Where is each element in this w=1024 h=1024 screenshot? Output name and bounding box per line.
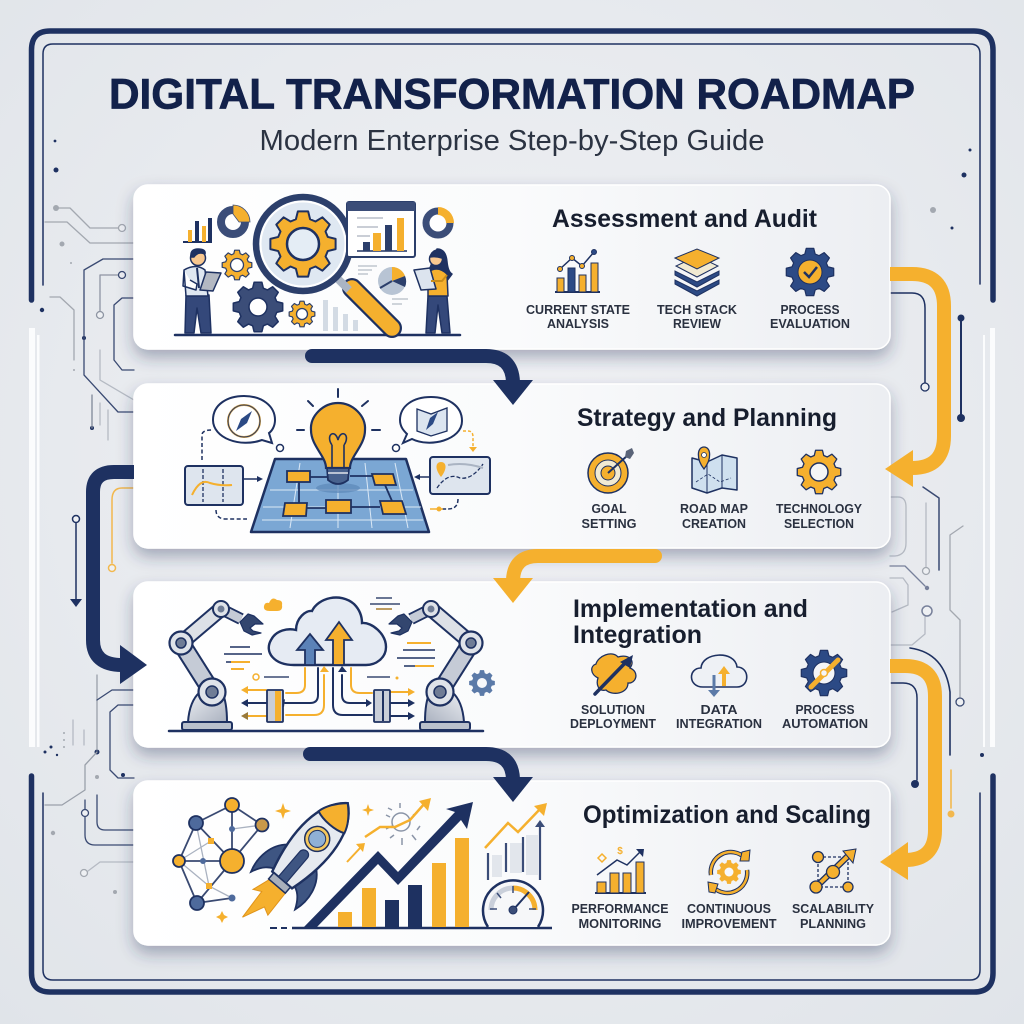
heading: Implementation and (573, 595, 808, 623)
panel 4: optimization and scaling (134, 781, 890, 945)
item: tech stack review (657, 249, 737, 331)
item: data integration (676, 655, 762, 731)
item: process evaluation: PROCESS (780, 303, 840, 317)
item: data integration: DATA (700, 703, 738, 717)
illustration: robots and cloud (169, 598, 495, 731)
circuit traces: left (40, 140, 134, 894)
item: scalability planning: PLANNING (800, 917, 866, 931)
item: current state analysis (526, 250, 630, 331)
item: data integration: INTEGRATION (676, 717, 762, 731)
illustration: strategy map and bulb (185, 389, 490, 532)
item: scalability planning (792, 849, 875, 931)
robot arm: right (389, 601, 482, 730)
item: continuous improvement (682, 850, 777, 931)
gauge (483, 880, 543, 927)
arrow: panel 1 to 2 yellow (885, 274, 944, 487)
arrow: panel 3 to 4 navy (310, 754, 533, 802)
item: goal setting: GOAL (592, 502, 627, 516)
item: continuous improvement: CONTINUOUS (687, 902, 771, 916)
item: performance monitoring (572, 846, 668, 931)
subtitle: Modern Enterprise Step-by-Step Guide (260, 125, 764, 157)
figure: man with clipboard (183, 249, 221, 333)
item: solution deployment (570, 654, 656, 731)
title: DIGITAL TRANSFORMATION ROADMAP (109, 70, 915, 118)
item: current state analysis: ANALYSIS (547, 317, 609, 331)
item: road map creation: ROAD MAP (680, 502, 748, 516)
white frame stripes (29, 328, 995, 747)
item: goal setting (582, 448, 636, 531)
item: scalability planning: SCALABILITY (792, 902, 875, 916)
heading: Assessment and Audit (552, 205, 818, 233)
arrow: panel 2 to 3 navy (93, 472, 147, 684)
item: technology selection: SELECTION (784, 517, 854, 531)
panel 2: strategy and planning (134, 384, 890, 548)
arrow: panel 2 to 3 yellow (493, 556, 655, 603)
figure: woman with clipboard (414, 249, 452, 333)
circuit traces: right (890, 148, 984, 818)
heading (573, 595, 808, 649)
item: performance monitoring: MONITORING (578, 917, 662, 931)
arrow: panel 3 to 4 yellow (880, 666, 935, 880)
item: road map creation: CREATION (682, 517, 746, 531)
item: solution deployment: SOLUTION (581, 703, 645, 717)
item: goal setting: SETTING (582, 517, 636, 531)
item: process evaluation (770, 248, 850, 331)
item: performance monitoring: PERFORMANCE (572, 902, 668, 916)
item: performance monitoring: $ (617, 846, 623, 857)
heading: Integration (573, 621, 702, 649)
bar chart with rising arrow (270, 802, 552, 928)
item: process evaluation: EVALUATION (770, 317, 850, 331)
item: road map creation (680, 447, 748, 531)
illustration: audit scene (175, 197, 460, 335)
heading: Strategy and Planning (577, 404, 837, 432)
item: process automation (782, 650, 868, 731)
cloud with upload arrows (269, 598, 386, 665)
panel 1: assessment and audit (134, 185, 890, 349)
network graph (173, 798, 268, 910)
item: process automation: PROCESS (796, 703, 854, 717)
item: tech stack review: TECH STACK (657, 303, 737, 317)
rocket (223, 783, 372, 941)
item: process automation: AUTOMATION (782, 717, 868, 731)
heading: Optimization and Scaling (583, 801, 871, 829)
item: solution deployment: DEPLOYMENT (570, 717, 656, 731)
item: current state analysis: CURRENT STATE (526, 303, 630, 317)
panel 3: implementation and integration (134, 582, 890, 747)
item: technology selection (776, 450, 863, 531)
robot arm: left (170, 601, 263, 730)
illustration: growth scene (173, 783, 552, 941)
arrow: panel 1 to 2 navy (312, 356, 533, 405)
item: continuous improvement: IMPROVEMENT (682, 917, 777, 931)
item: tech stack review: REVIEW (673, 317, 721, 331)
item: technology selection: TECHNOLOGY (776, 502, 863, 516)
